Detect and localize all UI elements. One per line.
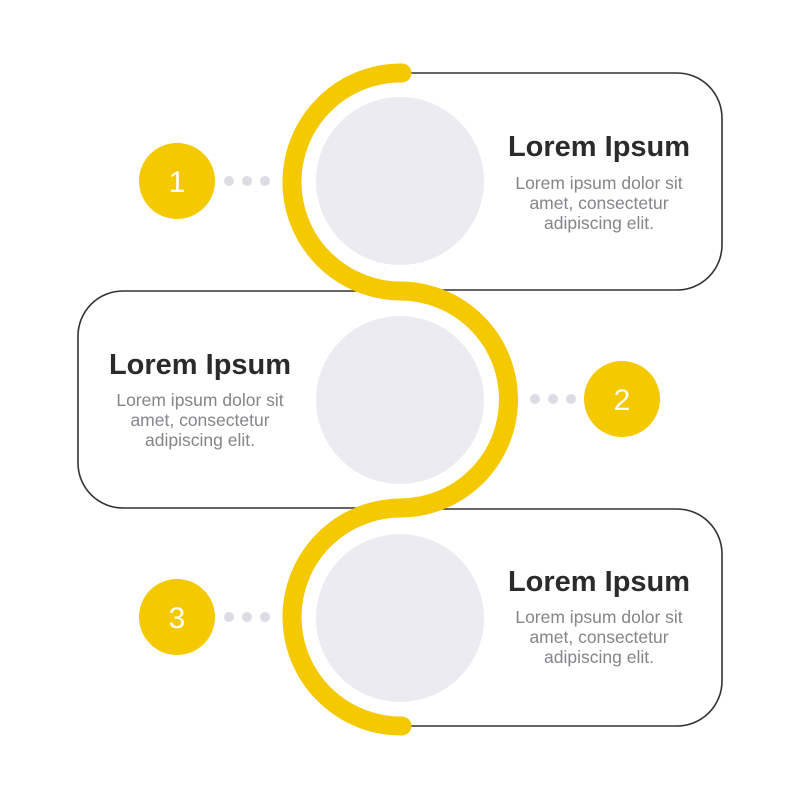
text block 2: amet, consectetur [130,410,270,430]
number 2 badge [584,361,660,437]
text block 2: adipiscing elit. [145,430,255,450]
text block 2: Lorem Ipsum [109,349,291,381]
panel: box 1 [400,73,722,290]
number 3 badge [139,579,215,655]
panel: box 2 [78,291,400,508]
text block 1: Lorem ipsum dolor sit [515,173,683,193]
number 2 badge: 2 [614,384,630,417]
dots 1 [224,176,270,186]
dots 2 [530,394,576,404]
text block 1: amet, consectetur [529,193,669,213]
text block 3 [508,566,690,667]
number 3 badge: 3 [169,602,185,635]
image placeholder circles [316,97,484,702]
text block 1 [508,131,690,233]
text block 3: Lorem Ipsum [508,566,690,598]
yellow S-curve [292,73,508,726]
dots 3 [224,612,270,622]
panel: box 3 [400,509,722,726]
text block 3: amet, consectetur [529,627,669,647]
text block 2: Lorem ipsum dolor sit [116,390,284,410]
number 1 badge: 1 [169,166,185,199]
text block 3: adipiscing elit. [544,647,654,667]
text block 1: Lorem Ipsum [508,131,690,163]
number 1 badge [139,143,215,219]
text block 2 [109,349,291,450]
text block 3: Lorem ipsum dolor sit [515,607,683,627]
text block 1: adipiscing elit. [544,213,654,233]
